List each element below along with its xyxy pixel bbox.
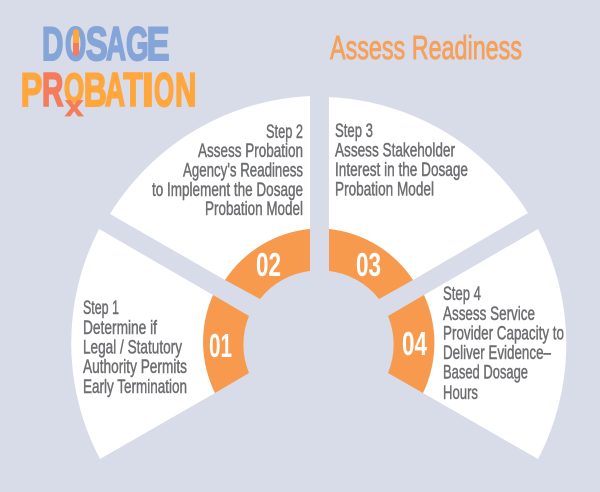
panel: step 1 (71, 229, 249, 459)
text: step 4: Assess Service (443, 303, 535, 325)
text: step 4: Step 4 (443, 283, 481, 305)
text: step 3: Probation Model (335, 178, 434, 200)
text: step 1 (83, 297, 187, 398)
text: step 4: Based Dosage (443, 362, 528, 384)
logo word: PROBATION: T (123, 65, 143, 117)
logo Rx mark: x (65, 88, 84, 123)
logo word: PROBATION (21, 63, 196, 117)
panel: step 3 (329, 97, 528, 299)
text: step 1: Authority Permits (83, 356, 187, 378)
number band: 03 (329, 229, 413, 299)
logo word: PROBATION: R (42, 64, 63, 117)
text: step 3 (335, 120, 468, 200)
logo word: PROBATION: P (21, 63, 42, 116)
icon: pill in the letter O (73, 29, 79, 56)
logo word: DOSAGE: G (126, 19, 149, 71)
text: step 3: Assess Stakeholder (335, 140, 455, 162)
panel: step 4 (388, 229, 566, 459)
text: step 2: Probation Model (205, 198, 303, 220)
logo word: PROBATION: I (142, 65, 154, 117)
text: step 4: Deliver Evidence– (443, 342, 551, 364)
number: 03: 03 (356, 246, 381, 283)
logo: Dosage Probation (21, 17, 196, 123)
logo word: PROBATION: A (105, 65, 125, 117)
number: 04: 04 (402, 325, 427, 362)
text: step 2: Agency's Readiness (183, 160, 303, 182)
logo word: PROBATION: B (84, 64, 107, 117)
title: Assess Readiness (330, 29, 522, 66)
panel shape: step 4 (423, 229, 566, 459)
logo word: PROBATION: N (175, 64, 196, 117)
logo word: DOSAGE: D (42, 18, 63, 71)
text: step 1: Step 1 (83, 297, 119, 319)
text: step 2: Assess Probation (198, 140, 303, 162)
text: step 2 (152, 121, 303, 220)
logo word: DOSAGE: A (106, 19, 126, 71)
panel: step 2 (110, 96, 310, 299)
text: step 3: Step 3 (335, 120, 373, 142)
logo word: DOSAGE: O (65, 18, 86, 71)
text: step 2: Step 2 (266, 121, 303, 143)
logo word: DOSAGE: E (147, 18, 169, 70)
text: step 4 (443, 283, 564, 404)
text: step 1: Determine if (83, 317, 157, 339)
number: 02: 02 (256, 246, 281, 283)
text: step 2: to Implement the Dosage (152, 179, 303, 201)
text: step 1: Early Termination (83, 376, 187, 398)
number: 01: 01 (209, 327, 232, 364)
logo word: DOSAGE (42, 17, 169, 71)
number band: 04 (388, 295, 434, 393)
text: step 1: Legal / Statutory (83, 336, 182, 358)
text: step 4: Hours (443, 382, 478, 404)
panel shape: step 3 (329, 97, 528, 280)
number band: 02 (225, 229, 310, 299)
text: step 3: Interest in the Dosage (335, 159, 468, 181)
panel shape: step 2 (110, 96, 310, 280)
logo word: PROBATION: O (154, 65, 174, 117)
logo word: DOSAGE: S (86, 17, 108, 70)
number band: 01 (203, 295, 249, 393)
panel shape: step 1 (71, 229, 215, 459)
logo word: PROBATION: O (64, 66, 84, 112)
